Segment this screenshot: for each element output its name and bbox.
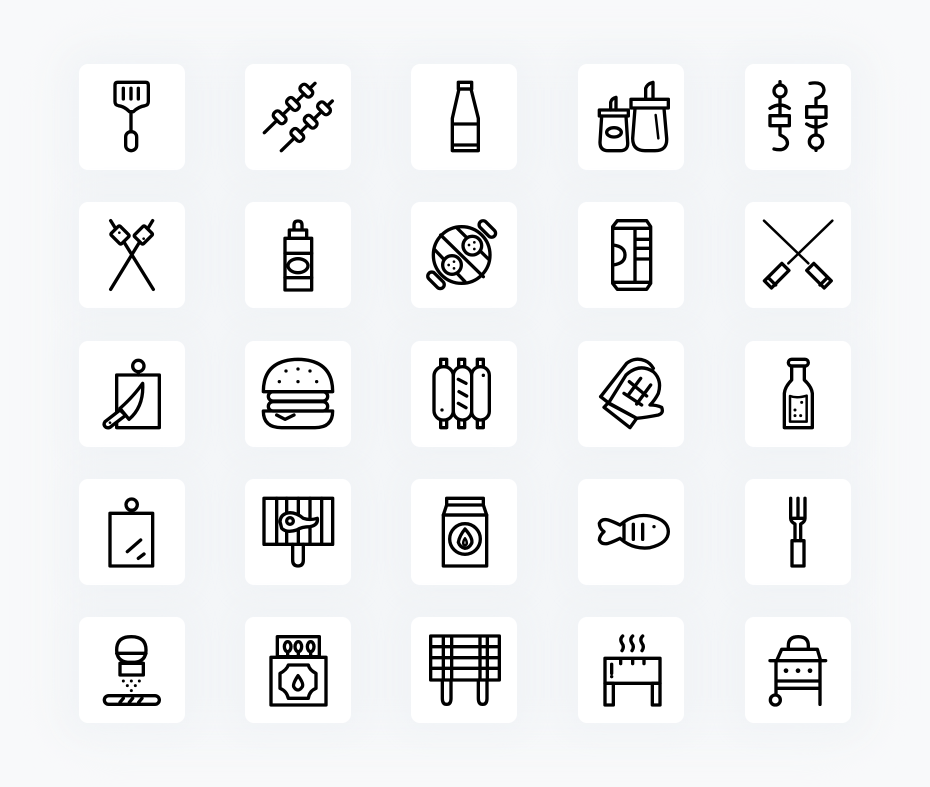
panel: mustard bottle tile (245, 202, 351, 308)
icon: condiment dispensers (598, 80, 670, 152)
panel: sauce bottle tile (411, 64, 517, 170)
panel: crossed skewers tile (745, 202, 851, 308)
icon: round grill with meatballs (426, 219, 498, 290)
panel: oven mitt tile (578, 341, 684, 447)
icon: grill fork (789, 496, 807, 568)
icon: spatula (113, 80, 150, 152)
icon: grill with steak (262, 496, 334, 568)
panel: salt shaker tile (79, 617, 185, 723)
panel: grill fork tile (745, 479, 851, 585)
panel: beer can tile (578, 202, 684, 308)
icon: hot sauce bottle (782, 358, 814, 430)
icon: marshmallow sticks (108, 218, 156, 292)
icon: charcoal bag (442, 496, 488, 568)
panel: burger tile (245, 341, 351, 447)
panel: grill cart tile (745, 617, 851, 723)
icon: vertical kebabs (768, 80, 828, 152)
icon: smoking brazier (603, 634, 662, 707)
icon: beer can (611, 219, 652, 291)
icon: cutting board with knife (102, 358, 161, 430)
panel: charcoal bag tile (411, 479, 517, 585)
icon: burger (262, 358, 334, 430)
icon: grill cart (768, 635, 828, 707)
panel: condiment dispensers tile (578, 64, 684, 170)
icon: wire grate (429, 634, 501, 706)
panel: fish tile (578, 479, 684, 585)
panel: meat skewers tile (245, 64, 351, 170)
icon: meat skewers (262, 82, 334, 152)
icon: crossed skewers (762, 219, 834, 290)
icon: salt shaker over baguette (102, 635, 161, 706)
panel: vertical kebabs tile (745, 64, 851, 170)
icon: cutting board (108, 497, 154, 568)
panel: grill with steak tile (245, 479, 351, 585)
panel: spatula tile (79, 64, 185, 170)
panel: smoking brazier tile (578, 617, 684, 723)
icon: oven mitt (598, 358, 664, 430)
icon: fish (598, 514, 670, 550)
panel: marshmallow sticks tile (79, 202, 185, 308)
panel: cutting board with knife tile (79, 341, 185, 447)
background halo (62, 48, 868, 740)
panel: round grill tile (411, 202, 517, 308)
icon: sauce bottle (450, 80, 480, 152)
panel: matchbox tile (245, 617, 351, 723)
icon: mustard bottle (283, 219, 314, 292)
panel: cutting board tile (79, 479, 185, 585)
panel: sausages tile (411, 341, 517, 447)
icon: sausages (432, 358, 491, 430)
icon: matchbox (269, 635, 328, 707)
panel: hot sauce bottle tile (745, 341, 851, 447)
panel: wire grate tile (411, 617, 517, 723)
